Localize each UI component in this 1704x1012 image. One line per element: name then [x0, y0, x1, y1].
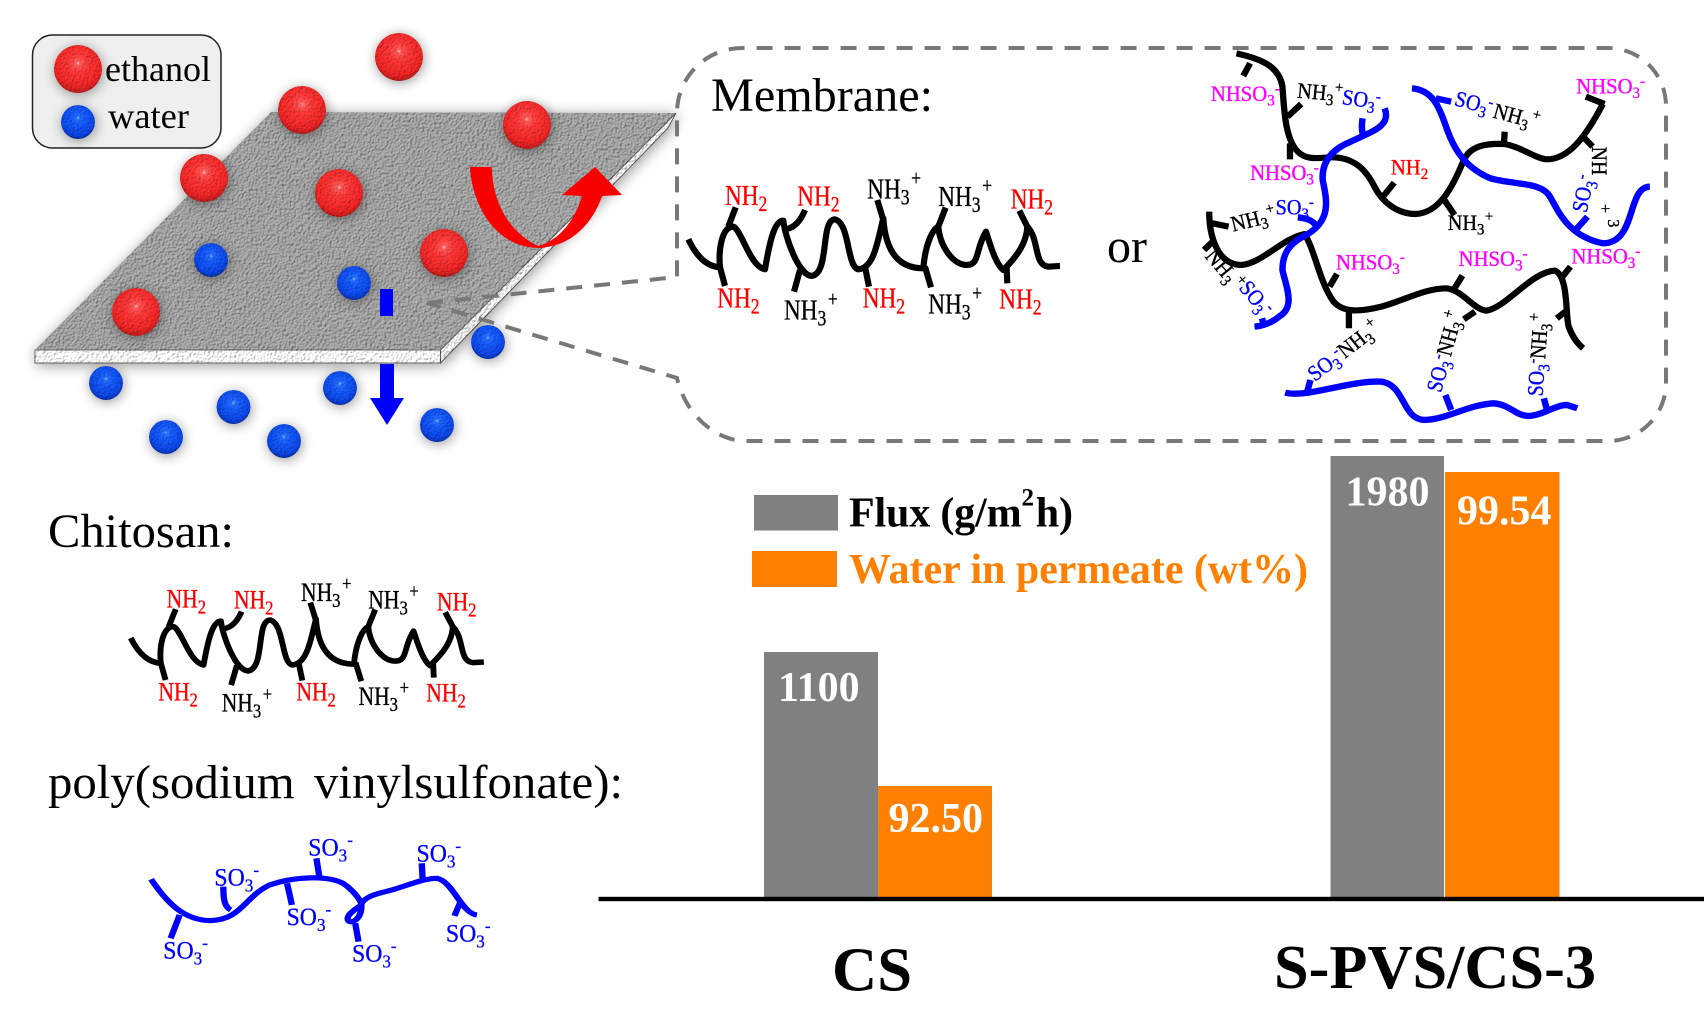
membrane chitosan chain: NH — [867, 173, 901, 205]
chitosan chain: NH — [234, 587, 265, 615]
crosslinked network structure: - — [1309, 193, 1314, 211]
PVS chain: 3 — [317, 915, 326, 935]
chitosan chain: NH — [358, 683, 390, 712]
membrane chitosan chain: NH — [863, 282, 896, 314]
crosslinked network structure: 3 — [1362, 330, 1379, 348]
crosslinked network structure: NHSO — [1250, 160, 1306, 185]
S-PVS/CS-3 bars: 1980 — [1346, 470, 1430, 516]
membrane chitosan chain: 2 — [1033, 296, 1042, 320]
PVS chain: SO — [163, 937, 194, 964]
S-PVS/CS-3 bars: 99.54 — [1457, 489, 1552, 535]
PVS chain: SO — [287, 903, 317, 931]
chitosan chain: 2 — [328, 689, 336, 711]
crosslinked network structure: + — [1334, 79, 1344, 97]
or: or — [1107, 220, 1147, 273]
chitosan chain: 2 — [190, 689, 198, 711]
CS bars — [764, 652, 992, 897]
crosslinked network structure: NHSO — [1571, 244, 1628, 268]
PVS chain: - — [455, 835, 461, 856]
crosslinked network structure: - — [1429, 352, 1448, 361]
chitosan heading: Chitosan: — [48, 505, 234, 558]
PVS chain: - — [391, 935, 397, 956]
chitosan chain: NH — [158, 679, 190, 707]
membrane chitosan chain: + — [972, 282, 982, 306]
crosslinked network structure: - — [1635, 243, 1640, 260]
crosslinked network structure: NH — [1332, 326, 1371, 363]
crosslinked network structure: 3 — [1450, 320, 1469, 332]
crosslinked network structure: SO — [1341, 84, 1370, 113]
chitosan chain: + — [409, 580, 419, 602]
PVS chain: 3 — [382, 951, 391, 972]
membrane chitosan chain: NH — [999, 283, 1033, 315]
membrane chitosan chain: 3 — [901, 186, 910, 210]
crosslinked network structure: - — [1524, 358, 1542, 364]
ethanol molecules — [54, 33, 551, 336]
crosslinked network structure: + — [1530, 106, 1543, 125]
PVS chain: - — [326, 899, 331, 919]
CS bars: 92.50 — [888, 796, 983, 842]
crosslinked network structure: NHSO — [1576, 74, 1633, 98]
crosslinked network structure: - — [1573, 172, 1591, 181]
crosslinked network structure: - — [1328, 343, 1343, 359]
CS bars: 1100 — [778, 665, 860, 711]
membrane chitosan chain: 2 — [751, 295, 760, 319]
membrane chitosan chain: NH — [928, 288, 962, 320]
membrane chitosan chain: + — [982, 174, 992, 199]
crosslinked network structure: NH — [1228, 206, 1263, 237]
crosslinked network structure: NHSO — [1211, 81, 1267, 106]
crosslinked network structure: SO — [1567, 184, 1597, 214]
crosslinked network structure: + — [1596, 204, 1613, 213]
crosslinked network structure: 2 — [1421, 166, 1428, 183]
PVS chain: SO — [416, 840, 447, 868]
membrane chitosan chain: NH — [784, 294, 818, 326]
membrane chitosan chain: 3 — [972, 193, 981, 218]
chart legend: Flux (g/m — [849, 490, 1022, 536]
crosslinked network structure: 3 — [1477, 221, 1485, 239]
PVS chain: SO — [214, 864, 245, 892]
legend box: ethanol and water — [32, 35, 221, 148]
PVS chain: SO — [308, 834, 339, 862]
chitosan chain: + — [263, 683, 272, 705]
crosslinked network structure: NH — [1296, 78, 1328, 105]
crosslinked network structure: - — [1314, 159, 1319, 177]
crosslinked network structure: + — [1232, 271, 1251, 289]
crosslinked network structure: 3 — [1267, 92, 1275, 110]
crosslinked network structure: SO — [1276, 195, 1302, 220]
crosslinked network structure: 3 — [1535, 363, 1554, 372]
crosslinked network structure: 3 — [1366, 99, 1376, 117]
arrow: water permeates — [370, 289, 404, 425]
category label: CS: CS — [832, 936, 912, 1004]
membrane chitosan chain: 2 — [831, 193, 840, 217]
PVS chain: - — [485, 915, 491, 936]
crosslinked network structure: + — [1525, 312, 1544, 322]
crosslinked network structure: 3 — [1248, 302, 1267, 319]
crosslinked network structure: 3 — [1216, 273, 1235, 290]
PVS chain: 3 — [447, 851, 456, 872]
crosslinked network structure: NH — [1391, 155, 1421, 179]
crosslinked network structure — [1197, 53, 1650, 420]
chitosan chain: 3 — [399, 597, 408, 619]
water molecules — [61, 105, 505, 458]
chitosan chain: 2 — [468, 599, 476, 621]
crosslinked network structure: NH — [1587, 147, 1612, 175]
crosslinked network structure: NH — [1200, 244, 1238, 282]
membrane chitosan chain: NH — [797, 180, 831, 212]
chitosan chain: NH — [426, 680, 457, 708]
category label: S-PVS/CS-3: S-PVS/CS-3 — [1274, 934, 1596, 1002]
crosslinked network structure: 3 — [1476, 103, 1488, 122]
crosslinked network structure: NH — [1491, 98, 1526, 130]
crosslinked network structure: + — [1485, 208, 1493, 225]
chart legend: h) — [1036, 490, 1073, 536]
crosslinked network structure: NH — [1448, 210, 1477, 235]
membrane heading: Membrane: — [711, 69, 933, 122]
crosslinked network structure: 3 — [1392, 261, 1400, 278]
membrane chitosan chain — [688, 167, 1060, 331]
legend box: ethanol and water: ethanol — [105, 49, 211, 89]
PVS chain: SO — [446, 920, 476, 948]
arrow: ethanol rejected — [470, 167, 622, 248]
PVS chain: 3 — [476, 931, 485, 952]
membrane chitosan chain: + — [911, 167, 921, 191]
membrane chitosan chain: NH — [1011, 183, 1044, 215]
chitosan chain: 2 — [265, 597, 273, 619]
S-PVS/CS-3 bars — [1330, 456, 1560, 897]
chart legend: Water in permeate (wt%) — [849, 547, 1308, 593]
PVS chain: - — [202, 932, 208, 952]
crosslinked network structure: - — [1375, 88, 1382, 106]
PVS chain: 3 — [245, 875, 254, 896]
bar chart — [598, 456, 1704, 1004]
chitosan chain: 2 — [198, 596, 206, 618]
membrane chitosan chain: 3 — [818, 307, 826, 331]
crosslinked network structure: 3 — [1330, 355, 1347, 373]
crosslinked network structure: NH — [1525, 330, 1552, 360]
chitosan chain — [131, 573, 484, 722]
crosslinked network structure: 3 — [1583, 179, 1602, 190]
crosslinked network structure: 3 — [1306, 171, 1314, 189]
crosslinked network structure: SO — [1452, 86, 1484, 117]
crosslinked network structure: + — [1264, 199, 1276, 218]
PVS chain: 3 — [194, 948, 202, 968]
crosslinked network structure: NHSO — [1459, 246, 1515, 271]
chitosan chain: 3 — [253, 700, 261, 722]
crosslinked network structure: + — [1361, 313, 1379, 332]
crosslinked network structure: - — [1523, 245, 1528, 263]
x axis — [598, 897, 1704, 901]
chitosan chain: NH — [368, 587, 399, 615]
crosslinked network structure: 3 — [1604, 219, 1621, 227]
chitosan chain: NH — [296, 679, 328, 707]
chitosan chain: 2 — [457, 690, 466, 712]
chart legend: 2 — [1021, 484, 1034, 512]
crosslinked network structure: 3 — [1518, 116, 1530, 135]
PVS chain: - — [347, 829, 353, 850]
chitosan chain: NH — [222, 690, 253, 718]
crosslinked network structure: SO — [1522, 370, 1550, 397]
crosslinked network structure: 3 — [1259, 214, 1271, 233]
membrane chitosan chain: 3 — [962, 301, 971, 325]
crosslinked network structure: 3 — [1515, 257, 1523, 275]
PVS chain: - — [253, 859, 259, 880]
crosslinked network structure: - — [1275, 80, 1280, 98]
crosslinked network structure: - — [1400, 249, 1405, 266]
membrane chitosan chain: 2 — [1044, 196, 1053, 220]
legend box: ethanol and water: water — [108, 96, 189, 136]
crosslinked network structure: 3 — [1439, 359, 1458, 371]
crosslinked network structure: SO — [1302, 351, 1338, 386]
crosslinked network structure: - — [1486, 93, 1496, 112]
poly(sodium vinylsulfonate) heading: poly(sodium vinylsulfonate): — [48, 756, 623, 809]
chitosan chain: + — [342, 573, 351, 594]
crosslinked network structure: 3 — [1628, 255, 1636, 272]
crosslinked network structure: NHSO — [1336, 250, 1392, 274]
membrane chitosan chain: NH — [725, 180, 759, 212]
PVS chain: 3 — [339, 845, 347, 866]
dashed callout: membrane detail — [427, 48, 1666, 441]
chitosan chain: 3 — [390, 694, 398, 715]
crosslinked network structure: - — [1640, 73, 1645, 90]
crosslinked network structure: 3 — [1302, 205, 1309, 223]
crosslinked network structure: 3 — [1538, 323, 1557, 332]
PVS chain — [151, 829, 491, 972]
chitosan chain: 3 — [332, 590, 340, 611]
crosslinked network structure: 3 — [1633, 85, 1640, 102]
crosslinked network structure: + — [1439, 307, 1458, 320]
crosslinked network structure: - — [1262, 300, 1279, 315]
crosslinked network structure: NH — [1431, 325, 1464, 359]
membrane plate — [35, 112, 676, 363]
chitosan chain: NH — [437, 589, 468, 617]
chitosan chain: + — [400, 677, 409, 698]
PVS chain: SO — [352, 940, 382, 968]
membrane chitosan chain: 2 — [759, 192, 767, 217]
membrane chitosan chain: NH — [938, 181, 972, 213]
crosslinked network structure: SO — [1421, 364, 1453, 395]
membrane chitosan chain: + — [828, 288, 838, 312]
membrane chitosan chain: NH — [717, 282, 751, 314]
crosslinked network structure: SO — [1234, 276, 1270, 311]
chitosan chain: NH — [301, 579, 332, 608]
chart legend — [752, 484, 1308, 593]
chitosan chain: NH — [167, 586, 198, 614]
crosslinked network structure: 3 — [1325, 91, 1334, 110]
membrane chitosan chain: 2 — [896, 295, 905, 319]
